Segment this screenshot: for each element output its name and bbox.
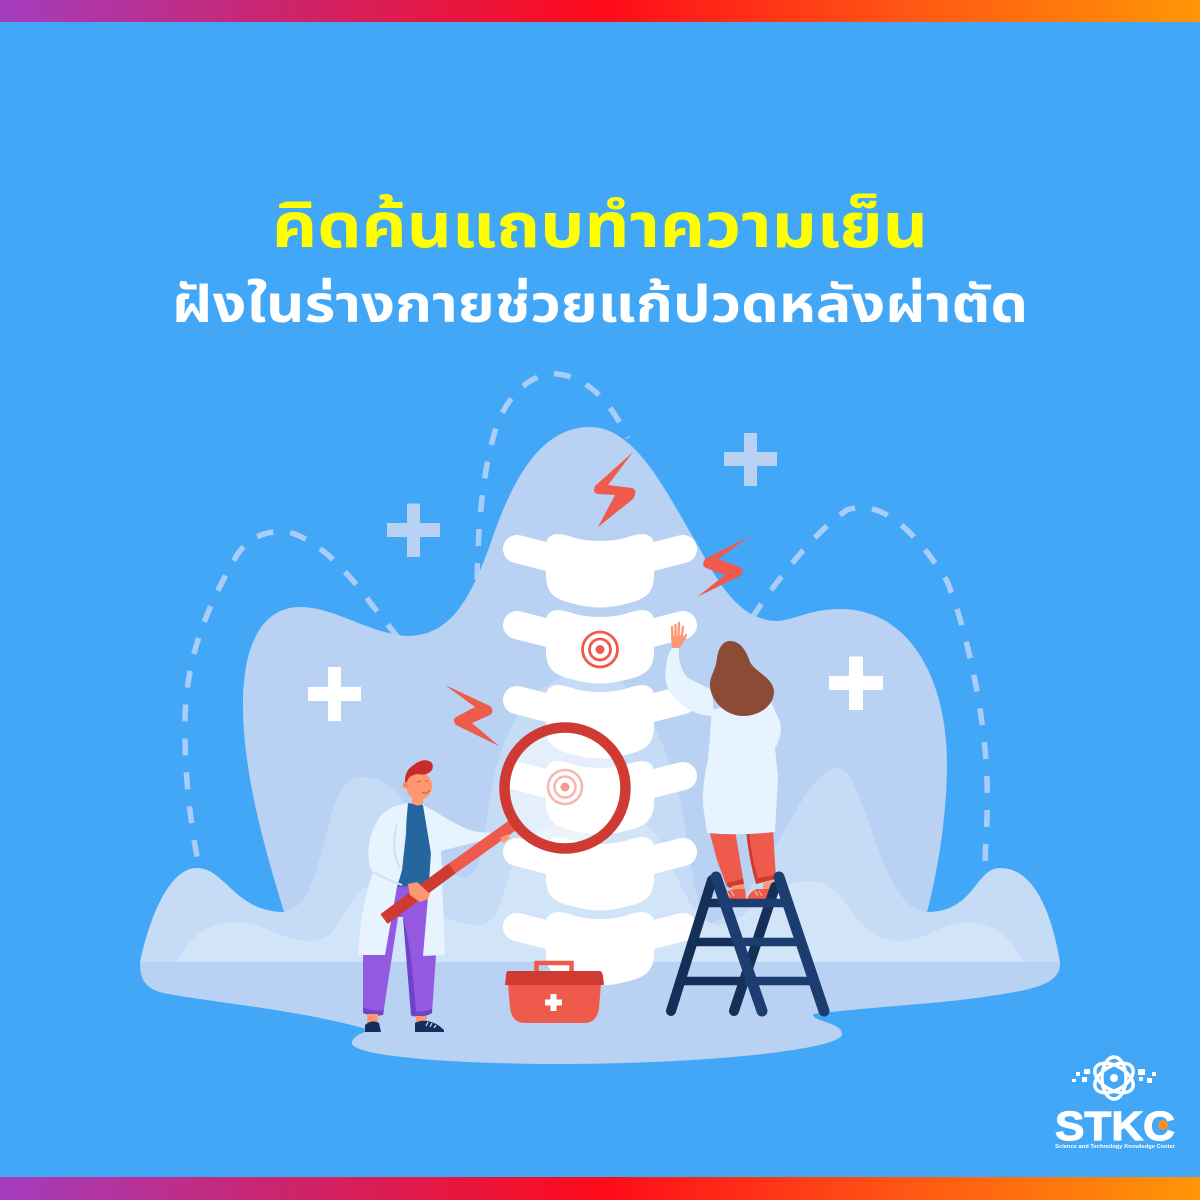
backdrop: side hills xyxy=(140,672,1060,962)
vertebra 3 xyxy=(517,685,683,758)
man: hair xyxy=(405,760,433,782)
man: shoe laces xyxy=(426,1022,436,1028)
illustration backdrop xyxy=(140,427,1060,1064)
man: left shoe xyxy=(365,1021,381,1032)
ladder front legs xyxy=(716,877,824,1011)
bottom gradient bar xyxy=(0,1177,1200,1200)
man: head xyxy=(406,772,432,800)
plus: left white xyxy=(308,667,361,721)
lightning bolt: top xyxy=(594,452,635,527)
STKC logo xyxy=(1055,1057,1176,1150)
spine xyxy=(517,534,683,986)
backdrop: main hills xyxy=(243,427,947,962)
man: shirt xyxy=(397,803,431,887)
logo atom xyxy=(1090,1057,1138,1099)
stepladder xyxy=(671,877,824,1011)
woman: trousers xyxy=(709,830,776,887)
ladder rungs front half xyxy=(725,903,812,981)
lightning bolt: right xyxy=(697,536,750,597)
woman: hair xyxy=(710,641,774,716)
man: hand on handle xyxy=(500,834,510,843)
woman: ankles xyxy=(732,880,776,891)
kit handle xyxy=(536,963,572,975)
logo wordmark: STKC xyxy=(1055,1103,1175,1149)
vertebra 4 xyxy=(517,761,683,834)
plus: top centre-left xyxy=(387,504,440,557)
backdrop: front hills xyxy=(177,812,1023,962)
plus: right white xyxy=(829,656,883,710)
man doctor xyxy=(358,760,507,1032)
magnifying glass xyxy=(384,728,626,919)
woman: trouser shading xyxy=(727,831,776,888)
man: right shoe xyxy=(415,1021,444,1032)
backdrop: floor xyxy=(140,962,1060,1064)
logo tagline: Science and Technology Knowledge Center xyxy=(1055,1144,1176,1150)
woman: coat xyxy=(703,695,781,834)
man: ear xyxy=(402,782,408,788)
magnifying lens tint xyxy=(510,733,620,843)
woman: raised sleeve xyxy=(665,648,714,716)
dashed arc: right xyxy=(752,507,987,861)
ring xyxy=(504,728,626,848)
medical kit xyxy=(505,963,604,1023)
dashed arc: left xyxy=(185,532,400,890)
vertebra 1 xyxy=(517,534,683,608)
top gradient bar xyxy=(0,0,1200,22)
plus: top right xyxy=(724,433,777,486)
lens target xyxy=(548,770,582,804)
dashed arc: centre xyxy=(477,374,628,580)
man: sleeve shading xyxy=(373,825,402,885)
man: trousers xyxy=(363,885,436,1017)
handle xyxy=(450,825,513,870)
man: hand on grip xyxy=(408,882,430,902)
woman doctor xyxy=(665,623,781,899)
vertebra 2 xyxy=(517,610,683,684)
man: left coat panel xyxy=(358,803,408,955)
logo pixels xyxy=(1072,1069,1156,1083)
man: ankles xyxy=(367,1014,427,1023)
handle grip xyxy=(384,868,452,919)
kit body xyxy=(508,984,601,1023)
logo dot xyxy=(1158,1120,1168,1130)
ladder rungs back half xyxy=(680,903,745,981)
title xyxy=(172,192,1028,334)
lightning bolt: left xyxy=(445,685,499,746)
man: trouser shading xyxy=(363,917,432,1017)
woman: shoes xyxy=(717,889,776,899)
woman: raised hand xyxy=(671,623,686,649)
man: right coat panel and sleeve xyxy=(423,805,507,956)
title line 2: ฝังในร่างกายช่วยแก้ปวดหลังผ่าตัด xyxy=(172,276,1028,334)
title line 1: คิดค้นแถบทำความเย็น xyxy=(272,192,928,261)
woman: shoe laces xyxy=(727,891,762,897)
pain target on vertebra 2 xyxy=(582,632,618,667)
vertebra 6 xyxy=(517,912,683,986)
man: neck xyxy=(412,795,423,806)
man: face xyxy=(417,781,430,793)
ladder back legs xyxy=(671,880,775,1011)
kit cross xyxy=(545,994,562,1011)
kit lid xyxy=(505,971,604,985)
vertebra 5 xyxy=(517,837,683,910)
